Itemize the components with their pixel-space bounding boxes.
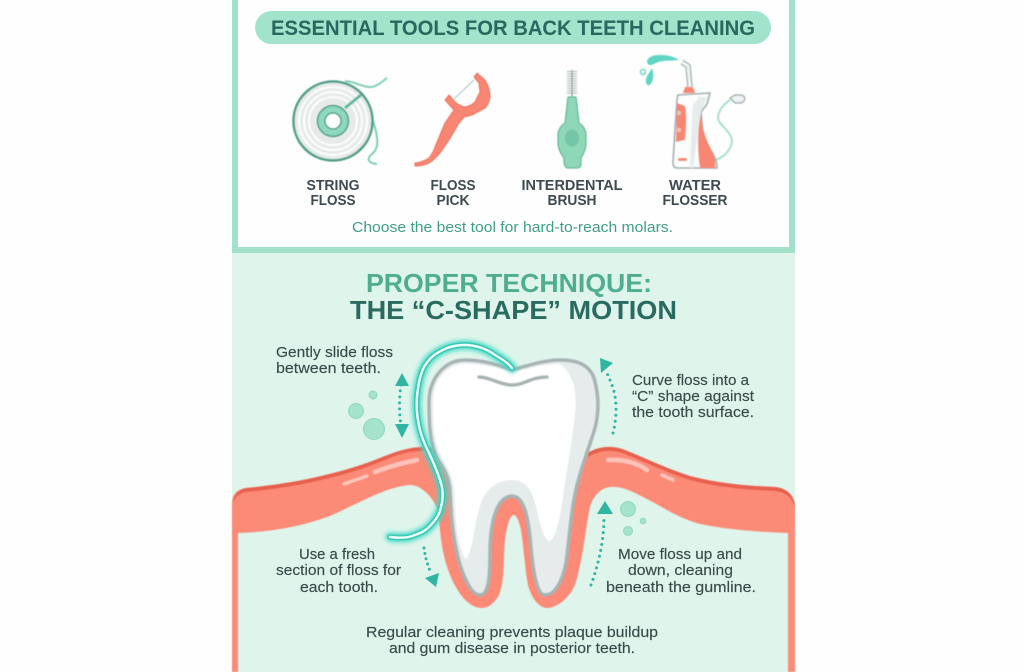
text: fresh section: Use a fresh — [299, 546, 375, 563]
heading pill: essential tools — [255, 11, 771, 44]
label: floss pick: FLOSS — [430, 178, 476, 194]
text: curve floss: the tooth surface. — [632, 404, 754, 421]
icon: interdental brush — [558, 70, 586, 168]
text: move floss — [606, 546, 756, 596]
text: move floss: Move floss up and — [618, 546, 742, 563]
label: string floss: STRING — [306, 178, 360, 194]
text: regular cleaning: and gum disease in posterior teeth. — [389, 640, 635, 657]
text: regular cleaning — [366, 624, 658, 657]
label: water flosser — [662, 178, 728, 209]
heading: proper technique — [350, 268, 677, 325]
gum — [232, 447, 795, 672]
heading: proper technique: THE “C-SHAPE” MOTION — [350, 295, 677, 325]
icon: water flosser — [640, 55, 745, 168]
label: string floss — [306, 178, 360, 209]
panel: essential tools — [235, 0, 792, 250]
label: floss pick: PICK — [436, 193, 470, 209]
icon: floss pick — [415, 73, 490, 166]
arrow: down left — [424, 548, 439, 587]
arrow: up right — [591, 501, 613, 585]
text: curve floss: “C” shape against — [632, 388, 755, 405]
text: gently slide floss: between teeth. — [276, 360, 381, 377]
caption: choose the best tool: Choose the best tool for hard-to-reach molars. — [352, 220, 673, 236]
text: fresh section: each tooth. — [300, 579, 378, 596]
text: fresh section: section of floss for — [276, 562, 401, 579]
bubbles: left — [348, 391, 384, 440]
text: move floss: down, cleaning — [628, 562, 733, 579]
heading: proper technique: PROPER TECHNIQUE: — [366, 268, 652, 298]
text: curve floss: Curve floss into a — [632, 372, 750, 389]
text: move floss: beneath the gumline. — [606, 579, 756, 596]
tooth — [429, 360, 598, 595]
text: regular cleaning: Regular cleaning prevents plaque buildup — [366, 624, 658, 641]
text: fresh section — [276, 546, 401, 596]
label: water flosser: FLOSSER — [662, 193, 728, 209]
label: floss pick — [430, 178, 476, 209]
label: string floss: FLOSS — [310, 193, 356, 209]
label: interdental brush: INTERDENTAL — [522, 178, 623, 194]
text: curve floss — [632, 372, 755, 421]
text: gently slide floss — [276, 344, 393, 377]
label: interdental brush — [522, 178, 623, 209]
bubbles: right — [620, 502, 646, 536]
arrow: curve up right — [600, 358, 616, 433]
text: gently slide floss: Gently slide floss — [276, 344, 393, 361]
floss: C-shape with glow — [390, 345, 512, 538]
arrow: double vertical slide — [395, 373, 409, 438]
icon: string floss spool — [294, 78, 387, 164]
panel: proper technique — [232, 253, 795, 672]
heading pill: essential tools: ESSENTIAL TOOLS FOR BACK TEETH CLEANING — [271, 17, 755, 40]
label: interdental brush: BRUSH — [548, 193, 596, 209]
label: water flosser: WATER — [669, 178, 722, 194]
